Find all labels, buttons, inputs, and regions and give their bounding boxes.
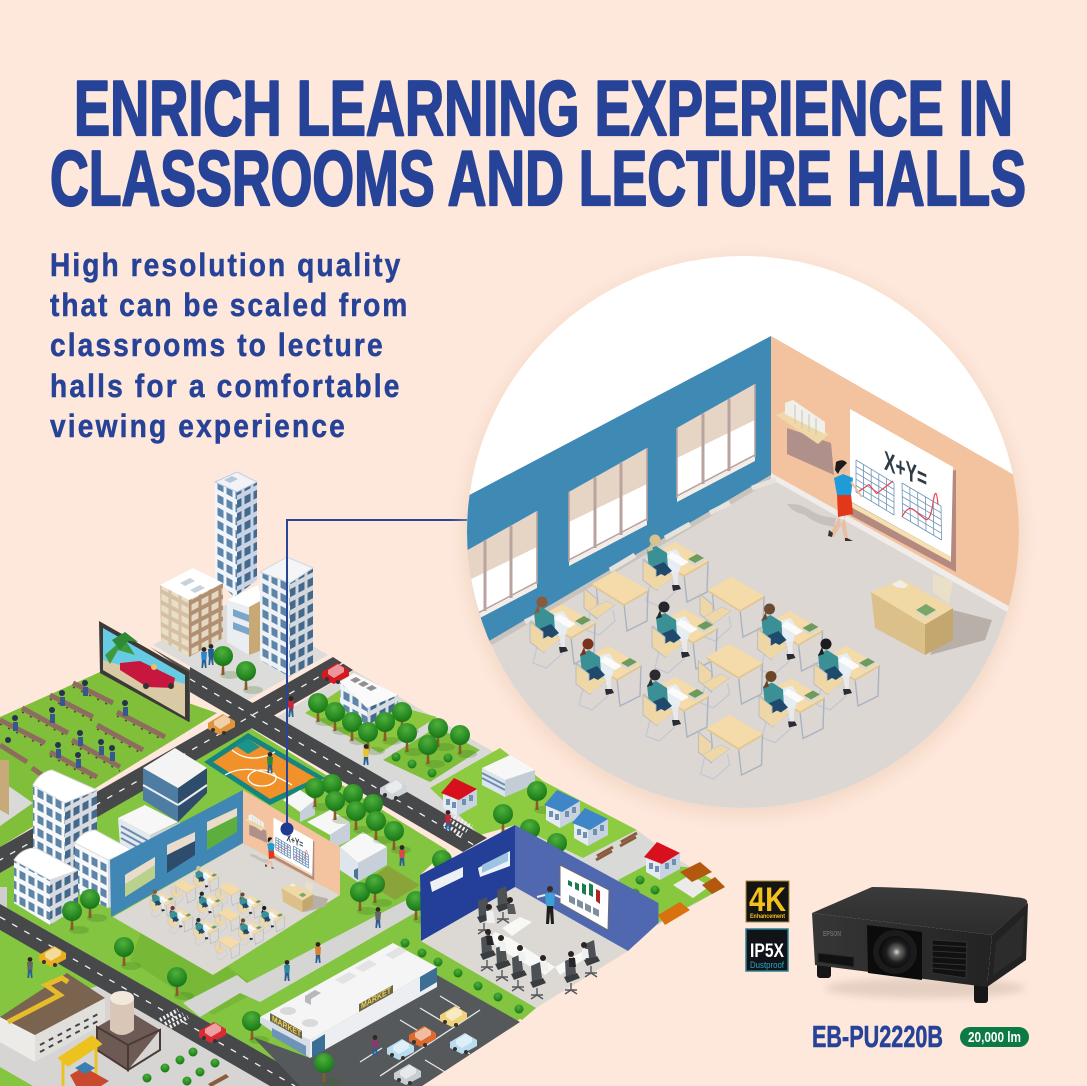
city people [27, 845, 405, 1043]
student [530, 596, 595, 668]
whiteboard shadow [850, 470, 956, 572]
student [652, 602, 717, 673]
front tower [260, 557, 313, 677]
tall tower [215, 472, 257, 600]
board heading: X+Y= [884, 445, 927, 495]
right grid [902, 483, 942, 540]
projector feet [817, 960, 988, 1003]
right vent [932, 940, 967, 978]
left grid [856, 460, 894, 515]
billboard with car [99, 621, 190, 722]
arched white buildings [33, 770, 97, 870]
desk row 1 [643, 534, 708, 606]
meeting table and chairs [477, 886, 600, 999]
4K badge: Enhancement [750, 913, 786, 920]
factory and port [0, 973, 229, 1086]
left vent [818, 953, 854, 967]
air conditioner [430, 867, 463, 892]
factory [0, 973, 105, 1062]
blue wall [460, 336, 771, 655]
description text: that can be scaled from [50, 288, 407, 323]
mini windows [125, 808, 237, 897]
street trees and cars [201, 644, 349, 735]
presenter [537, 886, 562, 924]
market sign left: MARKET [272, 1014, 301, 1039]
classroom floor [460, 475, 1030, 820]
conference room [420, 825, 658, 1008]
tree row near school [62, 774, 433, 1086]
basketball court [204, 733, 325, 805]
connector dot [280, 822, 294, 836]
projector right side [987, 903, 1028, 987]
dark glass building [143, 748, 207, 822]
IP5X badge: IP5X [750, 941, 784, 962]
student [814, 638, 879, 710]
student [758, 604, 822, 675]
tank and scaffold [97, 991, 160, 1070]
mini walls [110, 790, 243, 917]
small office building [340, 673, 398, 727]
projector front [812, 913, 992, 987]
empty desk [700, 577, 764, 641]
parked cars [372, 1006, 477, 1085]
windows [459, 384, 755, 629]
roads [0, 657, 487, 1086]
teacher shadow [787, 504, 836, 527]
teacher desk [871, 574, 992, 655]
title [50, 64, 1026, 222]
market sign right: MARKET [361, 985, 391, 1011]
connector line [287, 520, 467, 829]
green strip with bushes [400, 938, 536, 1020]
mini classroom [110, 790, 340, 975]
description text: High resolution quality [50, 248, 400, 283]
student [759, 671, 824, 742]
empty desk [698, 715, 762, 779]
classroom close-up [459, 336, 1030, 820]
skirting [771, 473, 1030, 625]
city ground [0, 600, 725, 1086]
student [643, 670, 708, 741]
market building [260, 943, 437, 1058]
description text: halls for a comfortable [50, 369, 399, 404]
projector shadow [825, 978, 1025, 998]
conference walls [420, 825, 515, 941]
peach wall [771, 336, 1030, 620]
tan building [160, 568, 223, 657]
tan edge building [0, 760, 9, 815]
IP5X badge [746, 929, 788, 971]
student desks and chairs [530, 534, 879, 779]
empty desk [698, 644, 762, 708]
empty desk [584, 571, 648, 635]
book shelf [776, 400, 834, 475]
mini furniture (same arrangement as the enlarged view) [150, 814, 328, 960]
white blocks right of classroom [283, 790, 387, 882]
market sign left [270, 1013, 302, 1039]
park trees [308, 693, 477, 778]
description text: viewing experience [50, 409, 345, 444]
buildings behind classroom [0, 748, 420, 925]
model name: EB-PU2220B [812, 1019, 943, 1054]
towers [160, 472, 313, 677]
brightness pill: 20,000 lm [968, 1029, 1021, 1046]
isometric city [0, 472, 725, 1086]
walkway [183, 893, 420, 1017]
yellow crane [60, 1037, 109, 1086]
wall shelf [478, 851, 510, 877]
lens housing [867, 925, 922, 980]
lens [873, 930, 917, 974]
mini floor [113, 843, 340, 975]
conference floor [421, 887, 628, 1008]
description text: classrooms to lecture [50, 328, 383, 363]
white circle [467, 256, 1019, 808]
brightness pill [960, 1027, 1029, 1047]
4K badge: 4K [749, 881, 786, 919]
IP5X badge: Dustproof [750, 960, 784, 970]
rooftop building near road [482, 755, 535, 797]
graph lines [858, 481, 938, 520]
mid building [227, 585, 262, 655]
brand label: EPSON [823, 931, 841, 938]
low building [118, 805, 180, 849]
projector top [812, 887, 1027, 935]
presentation board [560, 865, 609, 930]
product: projector [746, 881, 1029, 1054]
houses and lot items [380, 778, 725, 925]
parking lot [253, 975, 520, 1086]
teacher [828, 460, 862, 541]
description text [50, 248, 407, 444]
whiteboard [849, 409, 953, 562]
cinema audience benches [0, 680, 165, 781]
garden plot [376, 866, 420, 900]
student [576, 638, 641, 710]
soft circle shadow [464, 258, 1022, 816]
